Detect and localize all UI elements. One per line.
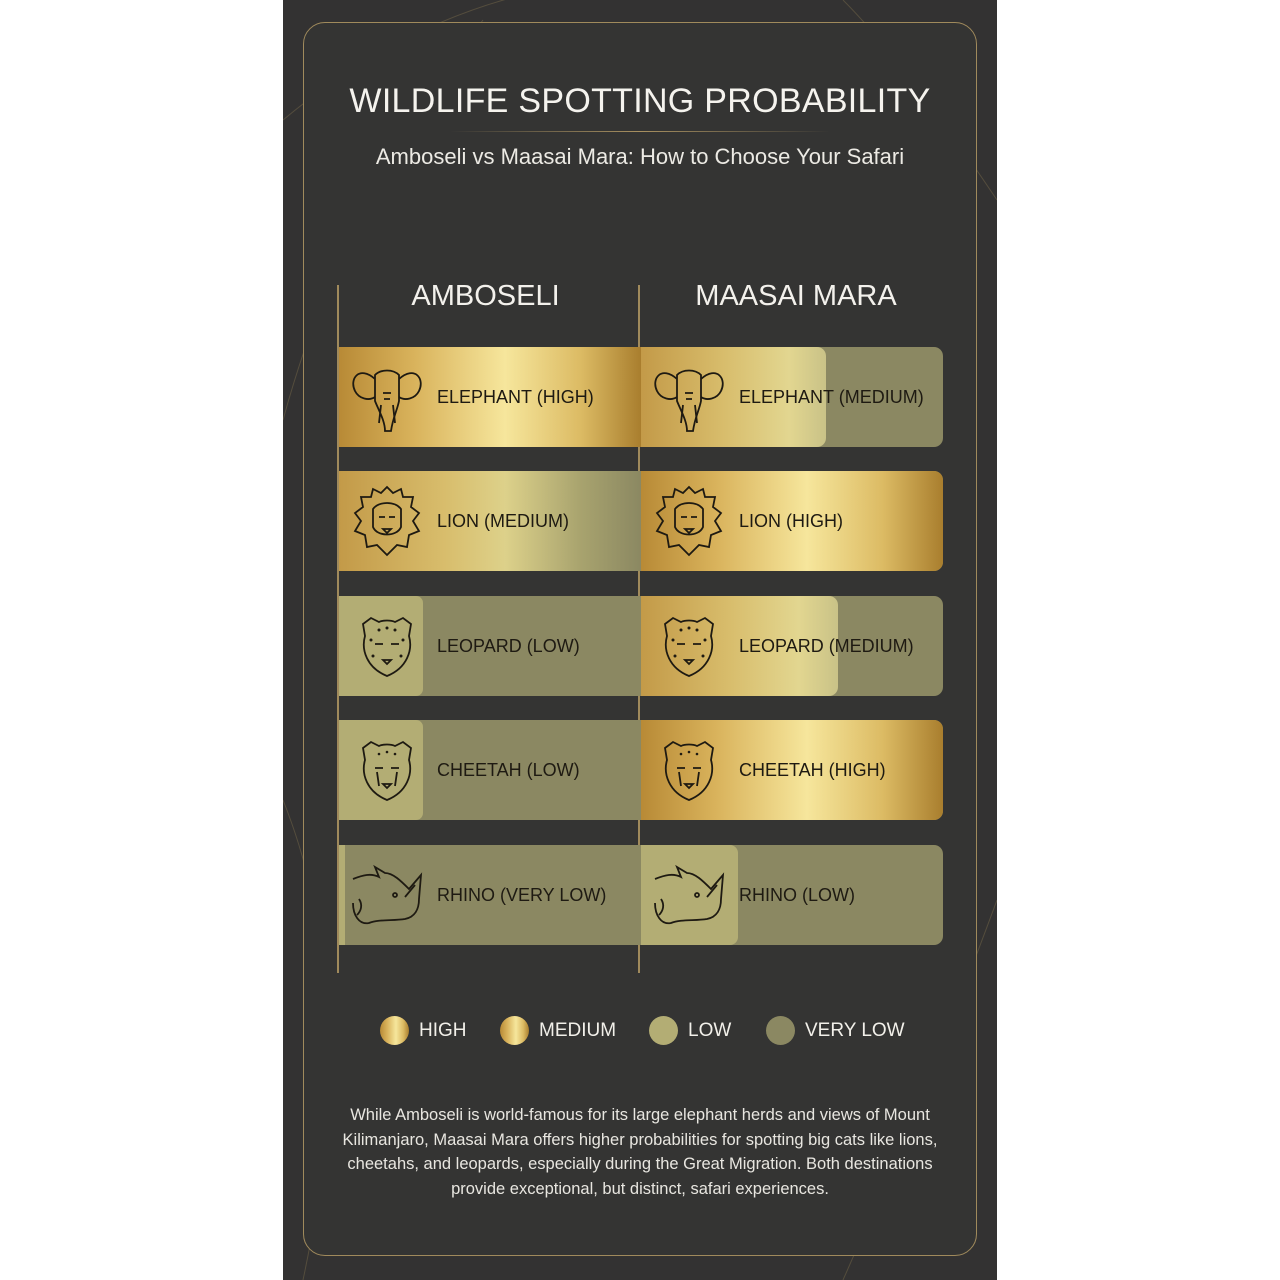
- icon: cheetah: [664, 741, 714, 801]
- dark panel background: [283, 0, 997, 1280]
- icon: elephant: [352, 370, 422, 432]
- legend: high: [380, 1016, 466, 1045]
- legend: very low: [766, 1016, 905, 1045]
- row: cheetah amboseli: [339, 720, 641, 820]
- legend: high: HIGH: [419, 1020, 466, 1041]
- icon: leopard: [664, 617, 714, 677]
- column header: Amboseli: AMBOSELI: [411, 280, 560, 312]
- legend: very low: VERY LOW: [805, 1020, 905, 1041]
- row: leopard amboseli: [339, 596, 641, 696]
- row: cheetah maasai mara: [641, 720, 943, 820]
- legend: [380, 1016, 905, 1045]
- icon: rhino: [654, 865, 724, 924]
- row: elephant maasai mara: ELEPHANT (MEDIUM): [739, 387, 924, 407]
- title underline: [450, 131, 830, 132]
- legend: low: LOW: [688, 1020, 731, 1041]
- icon: cheetah: [362, 741, 412, 801]
- legend: low: [649, 1016, 732, 1045]
- column header: Maasai Mara: MAASAI MARA: [695, 280, 897, 312]
- subtitle: Amboseli vs Maasai Mara: How to Choose Your Safari: [376, 144, 904, 169]
- row: rhino amboseli: [339, 845, 641, 945]
- row: leopard maasai mara: [641, 596, 943, 696]
- icon: leopard: [362, 617, 412, 677]
- row: elephant amboseli: [339, 347, 641, 447]
- row: lion maasai mara: [641, 471, 943, 571]
- row: elephant maasai mara: [641, 347, 943, 447]
- row: cheetah amboseli: CHEETAH (LOW): [437, 760, 580, 780]
- row: rhino maasai mara: RHINO (LOW): [739, 885, 855, 905]
- row: elephant amboseli: ELEPHANT (HIGH): [437, 387, 594, 407]
- inner gold-bordered frame: [303, 22, 977, 1256]
- icon: rhino: [352, 865, 422, 924]
- row: rhino maasai mara: [641, 845, 943, 945]
- summary text: While Amboseli is world-famous for its large elephant herds and views of Mount Kilimanjaro, Maasai Mara offers higher probabilities for spotting big cats like lions, cheetahs, and leopards, especially during the Great Migration. Both destinations provide exceptional, but distinct, safari experiences.: [343, 1106, 937, 1198]
- icon: lion: [656, 486, 722, 556]
- row: leopard amboseli: LEOPARD (LOW): [437, 636, 580, 656]
- row: cheetah maasai mara: CHEETAH (HIGH): [739, 760, 886, 780]
- row: leopard maasai mara: LEOPARD (MEDIUM): [739, 636, 914, 656]
- icon: lion: [354, 486, 420, 556]
- row: lion amboseli: [339, 471, 641, 571]
- row: lion amboseli: LION (MEDIUM): [437, 511, 569, 531]
- title: WILDLIFE SPOTTING PROBABILITY: [349, 82, 931, 120]
- row: lion maasai mara: LION (HIGH): [739, 511, 843, 531]
- icon: elephant: [654, 370, 724, 432]
- row: rhino amboseli: RHINO (VERY LOW): [437, 885, 606, 905]
- legend: medium: MEDIUM: [539, 1020, 616, 1041]
- legend: medium: [500, 1016, 616, 1045]
